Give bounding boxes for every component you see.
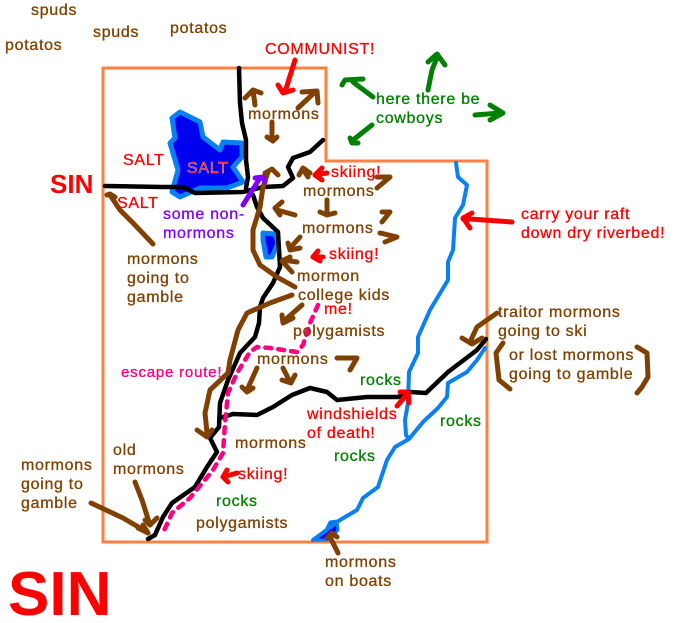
lake salt label: SALT: [187, 160, 229, 177]
brown labels: mormons: [302, 220, 374, 237]
brown labels: gamble: [127, 289, 184, 306]
rivers: [313, 163, 485, 540]
lake powell: [313, 521, 338, 540]
scattered potato labels: potatos: [170, 20, 227, 37]
brown labels: polygamists: [196, 515, 288, 532]
red labels: [117, 41, 665, 483]
red labels: carry your raft: [521, 206, 630, 223]
non-mormons label: [163, 206, 245, 242]
scattered potato labels: spuds: [31, 2, 77, 19]
green labels: rocks: [334, 448, 376, 465]
brown labels: old: [113, 442, 136, 459]
brown labels: mormons: [21, 457, 93, 474]
brown labels: college kids: [298, 287, 390, 304]
green arrows: [342, 54, 503, 143]
scattered potato labels: spuds: [93, 24, 139, 41]
roads: [105, 68, 486, 539]
red labels: of death!: [307, 425, 376, 442]
brown labels: gamble: [21, 495, 78, 512]
brown labels: on boats: [325, 573, 392, 590]
purple arrow: [243, 177, 265, 205]
red labels: skiing!: [329, 246, 379, 263]
red arrows: [223, 60, 512, 482]
scattered potato labels: potatos: [5, 37, 62, 54]
brown labels: polygamists: [293, 323, 385, 340]
red labels: SALT: [123, 152, 165, 169]
brown labels: mormons: [257, 351, 329, 368]
state outline: [103, 68, 487, 542]
brown labels: mormons: [248, 106, 320, 123]
red labels: SALT: [117, 195, 159, 212]
utah lake: [263, 233, 278, 257]
green labels: rocks: [216, 493, 258, 510]
brown arrows: [91, 90, 648, 553]
brown labels: [21, 106, 634, 590]
brown labels: mormons: [303, 183, 375, 200]
brown labels: going to: [127, 270, 190, 287]
brown labels: mormon: [297, 268, 360, 285]
great salt lake: [170, 112, 243, 197]
non-mormons label: some non-: [163, 206, 245, 223]
brown labels: mormons: [235, 435, 307, 452]
brown labels: going to ski: [498, 323, 587, 340]
green labels: here there be: [376, 91, 480, 108]
red labels: me!: [324, 301, 353, 318]
escape route dashed line: [162, 305, 318, 535]
brown labels: or lost mormons: [509, 347, 634, 364]
green labels: [216, 91, 482, 510]
scattered potato labels: [5, 2, 227, 54]
green labels: rocks: [440, 413, 482, 430]
brown labels: mormons: [127, 251, 199, 268]
brown labels: mormons: [325, 554, 397, 571]
brown labels: going to: [21, 476, 84, 493]
green labels: cowboys: [376, 110, 443, 127]
red labels: down dry riverbed!: [521, 225, 665, 242]
red labels: COMMUNIST!: [265, 41, 375, 58]
brown labels: going to gamble: [509, 366, 633, 383]
SIN label small: SIN: [50, 169, 93, 199]
brown labels: mormons: [113, 461, 185, 478]
red labels: skiing!: [238, 466, 288, 483]
red labels: windshields: [306, 406, 397, 423]
red labels: skiing!: [331, 164, 381, 181]
green labels: rocks: [360, 372, 402, 389]
non-mormons label: mormons: [163, 225, 235, 242]
brown labels: traitor mormons: [498, 304, 621, 321]
escape route label: escape route!: [121, 364, 222, 381]
